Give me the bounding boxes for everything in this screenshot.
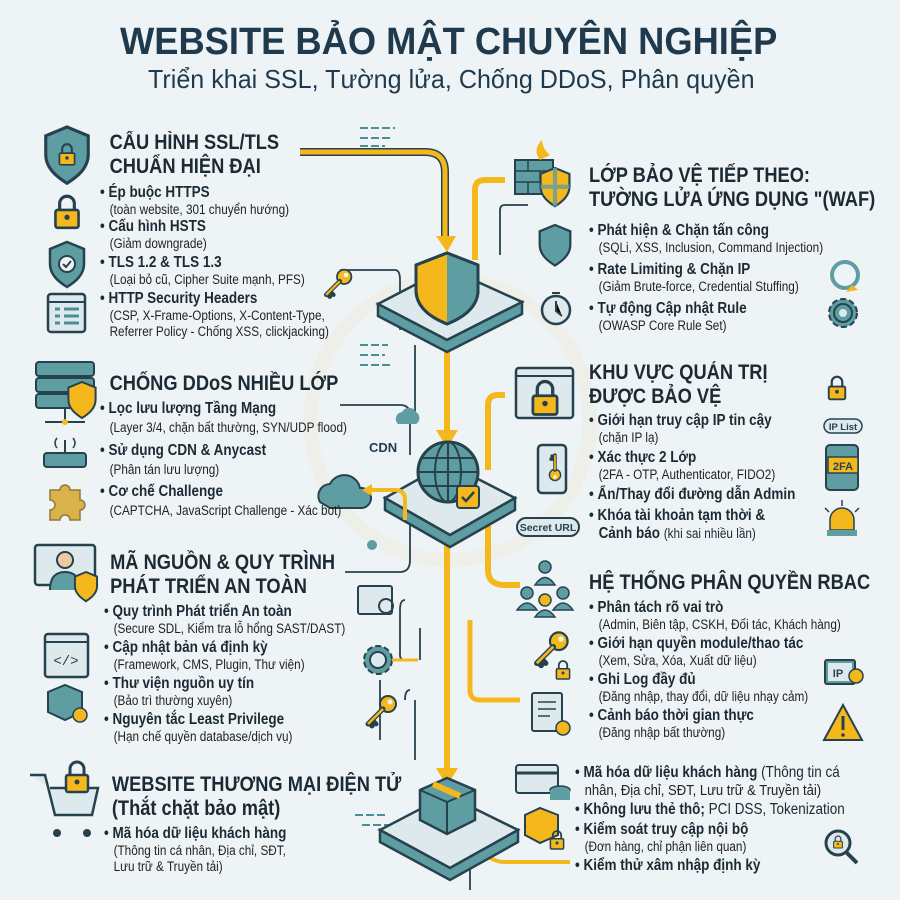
panel: DDoS: (Layer 3/4, chặn bất thường, SYN/UDP flood) — [110, 420, 347, 435]
panel: admin area: KHU VỰC QUẢN TRỊ — [589, 361, 768, 384]
panel: WAF: TƯỜNG LỬA ỨNG DỤNG "(WAF) — [589, 188, 875, 211]
icon: gear — [829, 299, 857, 327]
icon: keys — [326, 270, 351, 297]
panel: DDoS: (Phân tán lưu lượng) — [110, 462, 219, 477]
icon: developer — [35, 545, 97, 601]
panel: secure development: (Framework, CMS, Plugin, Thư viện) — [114, 657, 305, 672]
panel: e-commerce details: (Đơn hàng, chỉ phận liên quan) — [585, 839, 746, 854]
icon: phone key — [538, 445, 569, 493]
panel: e-commerce details: • Không lưu thẻ thô; PCI DSS, Tokenization — [575, 801, 845, 818]
panel: admin area: (chặn IP lạ) — [599, 430, 658, 445]
panel: secure development: (Hạn chế quyền database/dịch vụ) — [114, 729, 292, 744]
panel: secure development: MÃ NGUỒN & QUY TRÌNH — [110, 551, 335, 574]
panel: DDoS — [100, 371, 347, 518]
panel: DDoS: • Sử dụng CDN & Anycast — [100, 442, 266, 459]
panel: SSL/TLS: CẤU HÌNH SSL/TLS — [110, 131, 279, 154]
panel: secure development: • Thư viện nguồn uy tín — [104, 675, 254, 692]
panel: SSL/TLS: • Cấu hình HSTS — [100, 218, 206, 235]
panel: e-commerce: • Mã hóa dữ liệu khách hàng — [104, 825, 286, 842]
icon: warning — [824, 705, 862, 740]
panel: RBAC: • Phân tách rõ vai trò — [589, 599, 723, 616]
icon: admin lock window — [516, 368, 573, 418]
panel: e-commerce: (Thông tin cá nhân, Địa chỉ, SĐT, — [114, 843, 286, 858]
icon: shopping cart lock — [30, 762, 98, 837]
panel: e-commerce details: • Mã hóa dữ liệu khách hàng (Thông tin cá — [575, 764, 840, 781]
panel: SSL/TLS: (toàn website, 301 chuyển hướng) — [110, 202, 289, 217]
panel: admin area: (2FA - OTP, Authenticator, FIDO2) — [599, 467, 775, 482]
icon: firewall — [515, 140, 569, 206]
panel: WAF: • Tự động Cập nhật Rule — [589, 300, 747, 317]
icon: router — [44, 438, 86, 467]
panel: secure development: (Bảo trì thường xuyên) — [114, 693, 232, 708]
panel: SSL/TLS: CHUẨN HIỆN ĐẠI — [110, 155, 261, 178]
icon: 2FA phone: 2FA — [833, 461, 853, 473]
icon: card database — [516, 765, 570, 800]
icon: waf shield — [540, 225, 570, 266]
panel: admin area — [589, 361, 795, 542]
panel: e-commerce details: nhân, Địa chỉ, SĐT, Lưu trữ & Truyền tải) — [585, 782, 821, 799]
panel: SSL/TLS: • HTTP Security Headers — [100, 290, 257, 307]
icon: SSL shield lock — [46, 127, 88, 183]
CDN cloud — [318, 440, 405, 520]
panel: WAF: • Rate Limiting & Chặn IP — [589, 261, 750, 278]
platform 2 with globe — [385, 442, 515, 547]
icon: users — [517, 561, 573, 617]
panel: e-commerce: WEBSITE THƯƠNG MẠI ĐIỆN TỬ — [112, 773, 401, 796]
panel: admin area: • Giới hạn truy cập IP tin cậy — [589, 412, 772, 429]
icon: shield check — [50, 242, 84, 287]
panel: RBAC: • Giới hạn quyền module/thao tác — [589, 635, 803, 652]
panel: DDoS: • Cơ chế Challenge — [100, 483, 223, 500]
panel: secure development: • Cập nhật bản vá định kỳ — [104, 639, 268, 656]
subtitle: Triển khai SSL, Tường lửa, Chống DDoS, Phân quyền — [148, 64, 755, 94]
icon: IP monitor: IP — [833, 668, 843, 680]
platform 1 with shield — [378, 253, 522, 352]
icon: stopwatch — [542, 293, 570, 324]
icon: code window: </> — [53, 654, 79, 670]
panel: secure development: • Quy trình Phát triển An toàn — [104, 603, 292, 620]
icon: box lock — [525, 808, 564, 849]
icon: IP list — [824, 377, 862, 433]
panel: WAF: (OWASP Core Rule Set) — [599, 318, 727, 333]
panel: SSL/TLS: • TLS 1.2 & TLS 1.3 — [100, 254, 222, 271]
icon: magnifier lock — [826, 831, 857, 863]
panel: secure development — [104, 550, 345, 744]
icon: padlock — [55, 196, 79, 228]
panel: e-commerce — [104, 772, 402, 874]
panel: e-commerce details: • Kiểm thử xâm nhập định kỳ — [575, 857, 760, 874]
icon: puzzle — [50, 485, 85, 520]
panel: DDoS: • Lọc lưu lượng Tầng Mạng — [100, 400, 276, 417]
panel: admin area: ĐƯỢC BẢO VỆ — [589, 385, 721, 408]
panel: RBAC: • Cảnh báo thời gian thực — [589, 707, 754, 724]
icon: 2FA phone — [826, 445, 858, 490]
icon: key lock — [537, 632, 570, 679]
icon: code window — [45, 634, 88, 677]
icon: IP list: IP List — [829, 422, 858, 433]
panel: SSL/TLS: (Loại bỏ cũ, Cipher Suite mạnh, PFS) — [110, 272, 305, 287]
panel: WAF — [589, 163, 875, 333]
panel: DDoS: CHỐNG DDoS NHIỀU LỚP — [110, 372, 338, 395]
title: WEBSITE BẢO MẬT CHUYÊN NGHIỆP — [120, 21, 777, 63]
icon: alarm light — [825, 500, 859, 536]
panel: WAF: LỚP BẢO VỆ TIẾP THEO: — [589, 164, 810, 187]
panel: SSL/TLS: Referrer Policy - Chống XSS, clickjacking) — [110, 324, 329, 339]
central flow lines — [300, 128, 570, 890]
watermark — [310, 280, 590, 560]
panel: e-commerce: (Thắt chặt bảo mật) — [112, 797, 280, 820]
icon: document check — [532, 693, 570, 735]
panel: e-commerce details — [575, 764, 845, 874]
panel: RBAC: (Đăng nhập, thay đổi, dữ liệu nhạy cảm) — [599, 689, 808, 704]
secret URL tag: Secret URL — [520, 522, 577, 534]
panel: admin area: • Ẩn/Thay đổi đường dẫn Admin — [589, 486, 795, 503]
secret URL tag — [517, 518, 579, 536]
panel: WAF: • Phát hiện & Chặn tấn công — [589, 222, 769, 239]
panel: e-commerce: Lưu trữ & Truyền tải) — [114, 859, 223, 874]
small cloud — [396, 408, 419, 424]
icon: IP monitor — [825, 660, 863, 684]
panel: admin area: • Khóa tài khoản tạm thời & — [589, 507, 765, 524]
icon: server stack — [36, 362, 96, 425]
panel: SSL/TLS: (CSP, X-Frame-Options, X-Content-Type, — [110, 308, 325, 323]
panel: e-commerce details: • Kiểm soát truy cập nội bộ — [575, 821, 748, 838]
platform 3 with box — [380, 778, 518, 880]
icon: browser list — [48, 294, 85, 332]
panel: RBAC: • Ghi Log đầy đủ — [589, 671, 696, 688]
icon: package — [48, 685, 87, 722]
panel: secure development: • Nguyên tắc Least Privilege — [104, 711, 284, 728]
panel: secure development: PHÁT TRIỂN AN TOÀN — [110, 575, 307, 598]
panel: RBAC: (Đăng nhập bất thường) — [599, 725, 725, 740]
panel: RBAC: HỆ THỐNG PHÂN QUYỀN RBAC — [589, 571, 870, 594]
panel: DDoS: (CAPTCHA, JavaScript Challenge - Xác bot) — [110, 503, 341, 518]
panel: SSL/TLS: • Ép buộc HTTPS — [100, 184, 210, 201]
panel: RBAC: (Xem, Sửa, Xóa, Xuất dữ liệu) — [599, 653, 757, 668]
panel: admin area: • Xác thực 2 Lớp — [589, 449, 696, 466]
panel: SSL/TLS: (Giảm downgrade) — [110, 236, 207, 251]
panel: admin area: Cảnh báo (khi sai nhiều lần) — [599, 525, 756, 542]
panel: SSL/TLS — [100, 131, 329, 339]
panel: RBAC: (Admin, Biên tập, CSKH, Đối tác, Khách hàng) — [599, 617, 841, 632]
panel: WAF: (SQLi, XSS, Inclusion, Command Injection) — [599, 240, 823, 255]
panel: secure development: (Secure SDL, Kiểm tra lỗ hổng SAST/DAST) — [114, 621, 345, 636]
CDN cloud: CDN — [369, 440, 397, 455]
panel: RBAC — [589, 570, 870, 740]
icon: magnifier window, gear, key (middle left) — [358, 540, 418, 726]
icon: rate gauge — [832, 262, 858, 292]
panel: WAF: (Giảm Brute-force, Credential Stuffing) — [599, 279, 799, 294]
